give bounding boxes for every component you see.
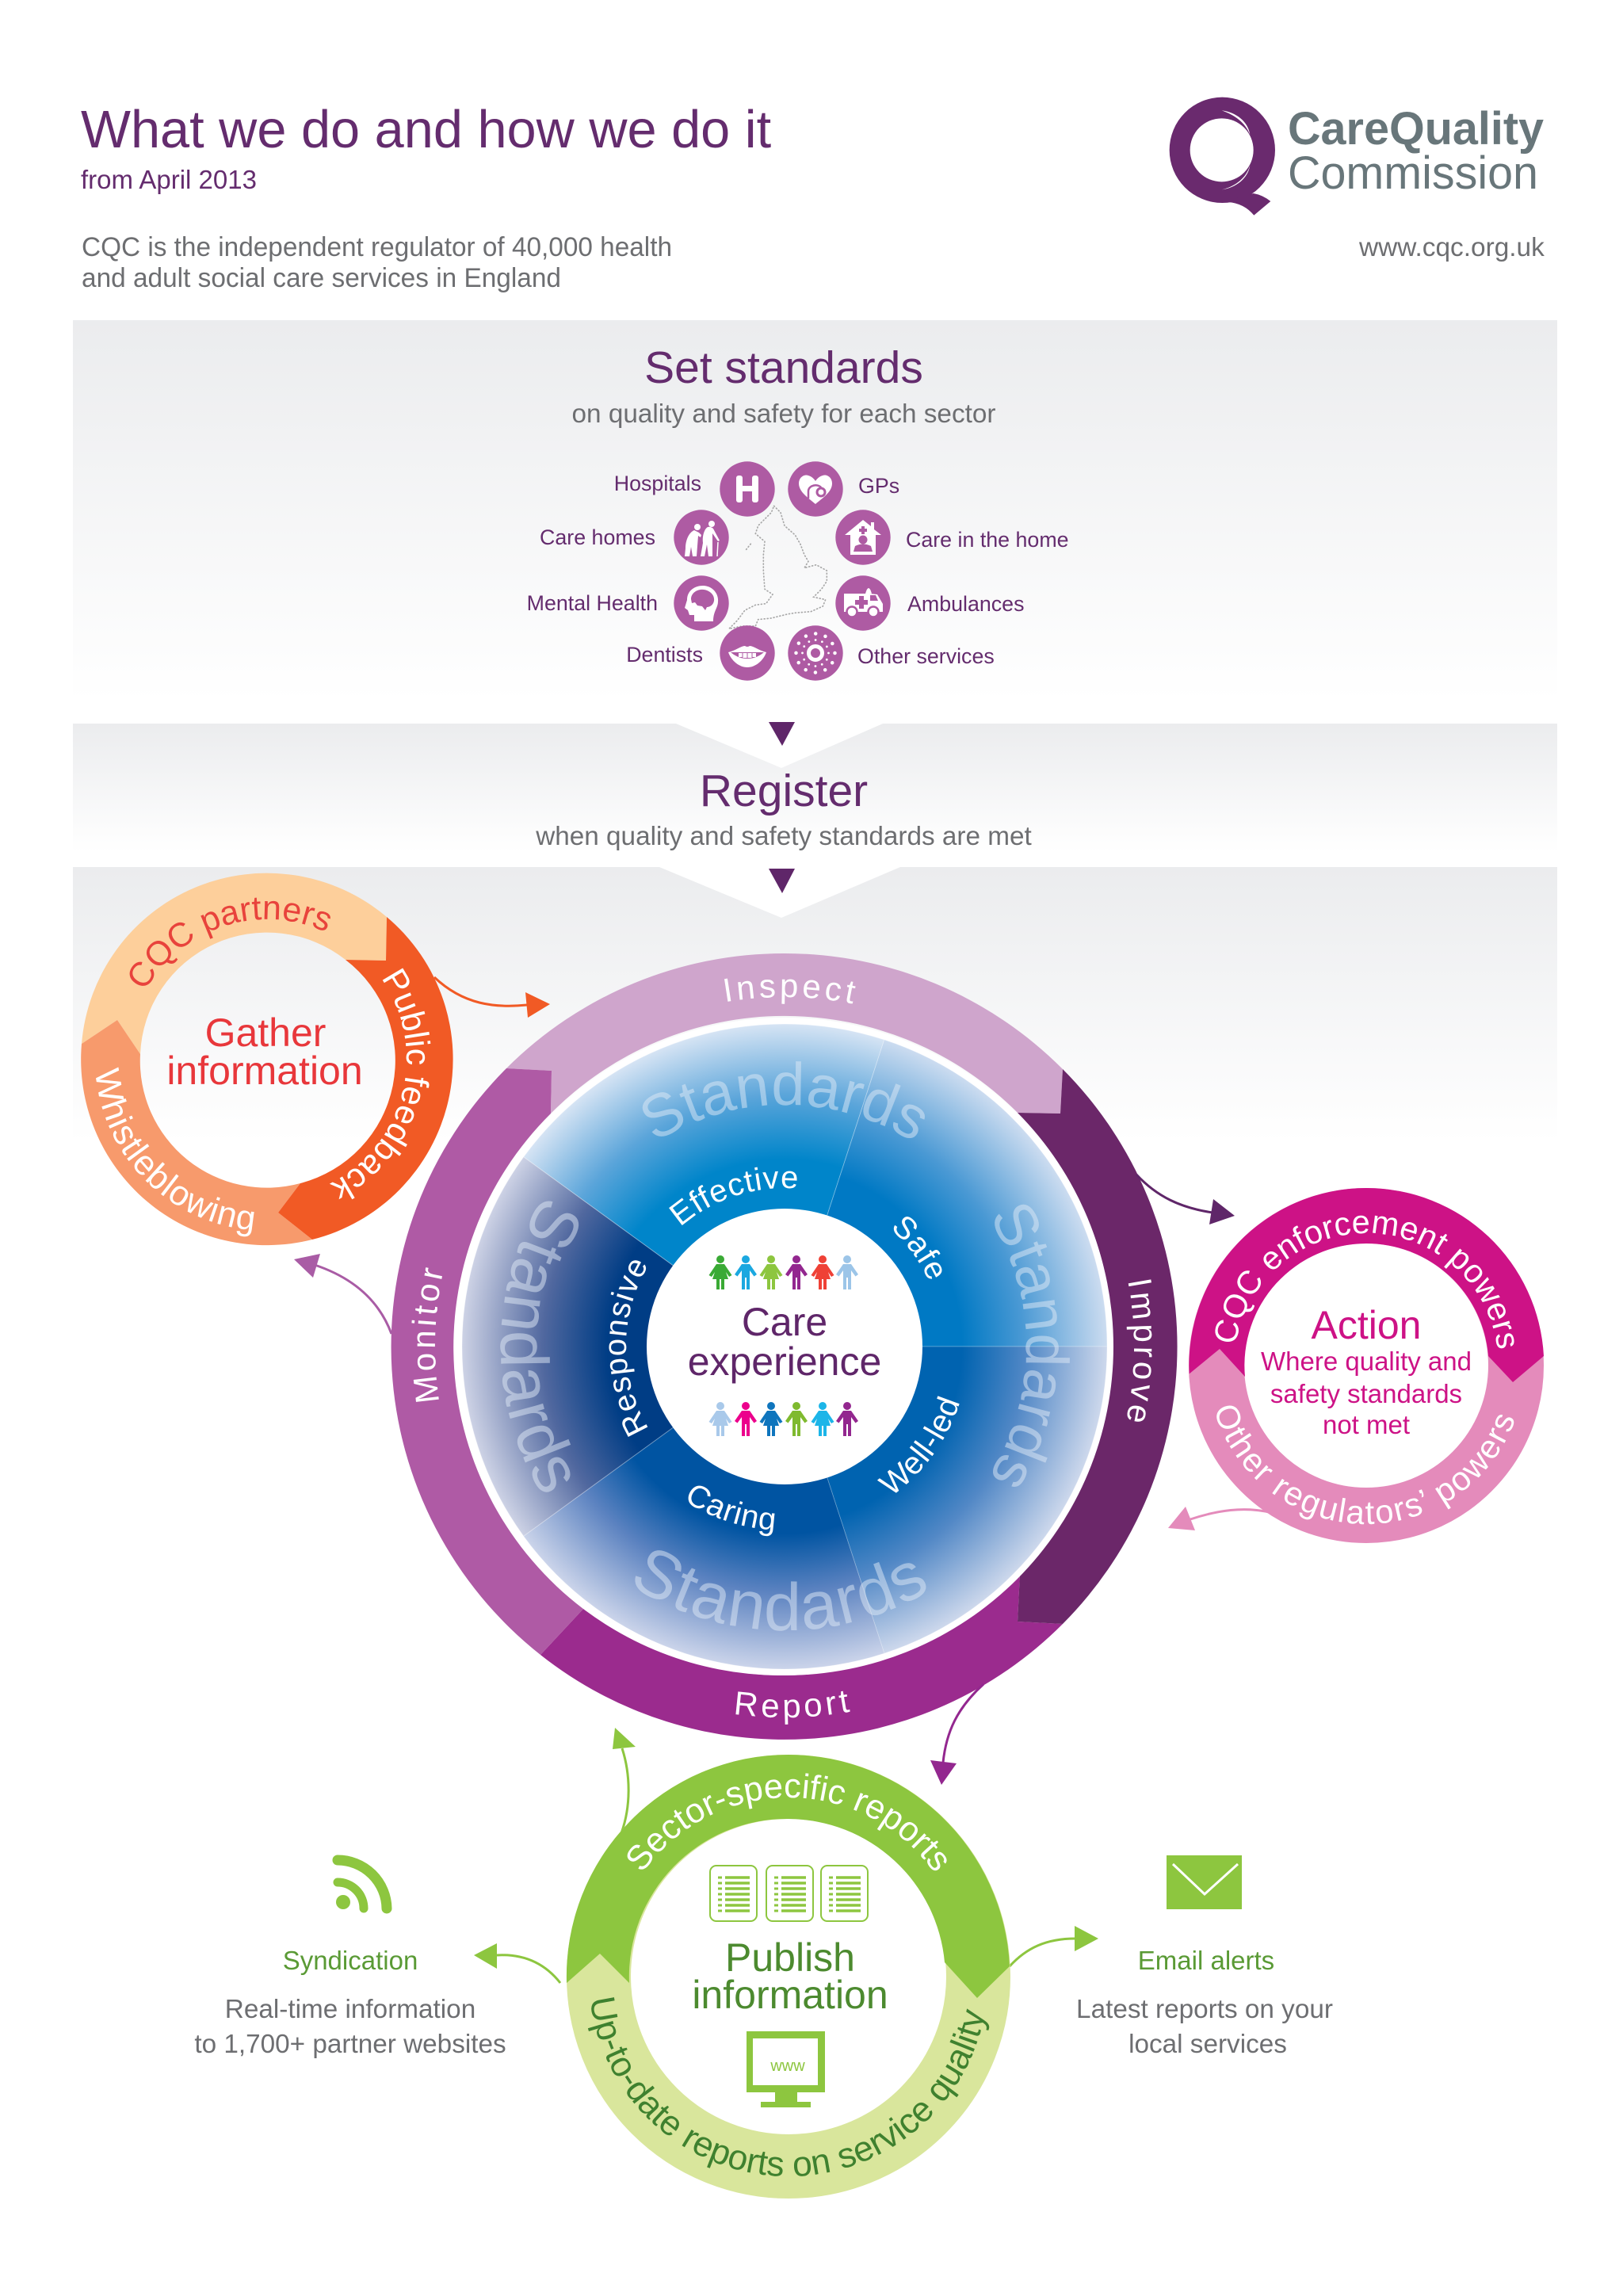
title: What we do and how we do it — [81, 101, 772, 159]
syndication description: to 1,700+ partner websites — [194, 2030, 506, 2059]
icon: envelope — [1167, 1855, 1242, 1909]
sector labels: Ambulances — [907, 592, 1024, 616]
segment: whistleblowing — [81, 1020, 312, 1245]
subtitle: date: from April 2013 — [81, 165, 257, 194]
arrow: improve to action — [1136, 1175, 1235, 1224]
action circle — [1189, 1188, 1544, 1543]
action heading: Action — [1312, 1303, 1421, 1347]
action description — [1261, 1347, 1472, 1439]
ghost standards labels: Standards — [642, 1061, 925, 1138]
heading: register: Register — [700, 766, 868, 816]
logo wordmark: Commission — [1288, 147, 1538, 199]
people row bottom — [708, 1402, 858, 1436]
arrow: register to inspection — [769, 869, 795, 893]
publish information text — [692, 1935, 888, 2017]
icon: hospitals — [720, 461, 775, 517]
ghost standards labels: Standards — [500, 1201, 579, 1492]
arrow: publish to report — [613, 1728, 636, 1833]
map of England — [729, 506, 827, 628]
syndication block — [194, 1860, 506, 2059]
ring: inspect — [506, 953, 1063, 1114]
arrow: monitor to gather — [294, 1254, 391, 1334]
action description: Where quality and — [1261, 1347, 1472, 1376]
subheading: register: when quality and safety standards are met — [535, 822, 1032, 851]
gather information circle — [81, 873, 453, 1246]
sector labels: Care homes — [540, 525, 655, 549]
website: www.cqc.org.uk — [1358, 233, 1545, 262]
ring: monitor — [391, 1068, 583, 1655]
sector labels: Other services — [857, 644, 995, 668]
segment: well-led — [785, 1347, 1107, 1653]
ring: report — [540, 1573, 1063, 1740]
publish information circle — [566, 1755, 1010, 2199]
ring text: Whistleblowing — [96, 1067, 254, 1236]
email description: local services — [1128, 2030, 1287, 2059]
panel: inspection cycle background — [73, 867, 1557, 1141]
ghost standards labels: Standards — [993, 1205, 1070, 1487]
publish information text: information — [692, 1973, 888, 2017]
segment: other regulators powers — [1216, 1216, 1516, 1515]
segment: responsive — [462, 1157, 785, 1536]
action description: safety standards — [1270, 1379, 1462, 1408]
segment labels: Well-led — [877, 1396, 960, 1493]
ring text: Sector-specific reports — [628, 1773, 947, 1870]
sector labels — [527, 472, 1069, 668]
segment: sector-specific reports — [567, 1755, 1010, 1998]
intro text: CQC is the independent regulator of 40,000 health — [82, 232, 672, 262]
white disc edge — [456, 1018, 1113, 1675]
ring text — [588, 1773, 989, 2176]
action description: not met — [1323, 1410, 1410, 1439]
care experience text: Care — [742, 1300, 827, 1344]
segment: up-to-date reports — [599, 1786, 978, 2167]
intro text — [82, 232, 672, 293]
email alerts block — [1076, 1855, 1333, 2059]
ghost standards labels: Standards — [636, 1550, 926, 1631]
logo wordmark — [1288, 103, 1544, 199]
syndication description — [194, 1995, 506, 2059]
segment labels: Effective — [669, 1167, 797, 1225]
arrow: publish to email — [1010, 1926, 1098, 1966]
ghost standards labels — [500, 1061, 1070, 1631]
ring text: Other regulators’ powers — [1216, 1406, 1514, 1525]
centre: care experience — [647, 1209, 922, 1484]
ring text: CQC partners — [130, 897, 330, 986]
arrow: publish to syndication — [474, 1943, 560, 1983]
icon: care homes — [674, 510, 729, 565]
sector labels: Hospitals — [614, 472, 701, 495]
ring labels: Monitor — [412, 1267, 442, 1402]
main cycle wheel — [391, 953, 1178, 1740]
segment: public feedback — [278, 917, 453, 1240]
email description — [1076, 1995, 1333, 2059]
segment labels: Responsive — [609, 1260, 648, 1437]
sector labels: Mental Health — [527, 591, 658, 615]
care experience text — [688, 1300, 881, 1384]
care experience text: experience — [688, 1339, 881, 1384]
icon: monitor — [747, 2031, 825, 2107]
segment labels: Caring — [688, 1485, 775, 1536]
panel: register background — [73, 724, 1557, 852]
segment: CQC partners — [82, 873, 387, 1054]
sector labels: Care in the home — [906, 528, 1069, 552]
icon: Q mark — [1170, 97, 1275, 216]
gather information text — [166, 1010, 363, 1093]
sector labels: Dentists — [626, 643, 703, 667]
ring labels: Report — [735, 1691, 850, 1725]
segment: safe — [785, 1040, 1107, 1347]
email description: Latest reports on your — [1076, 1995, 1333, 2024]
people row top — [708, 1255, 858, 1289]
arrow: report to publish — [930, 1684, 983, 1785]
segment: CQC enforcement powers — [1189, 1188, 1544, 1382]
icon: RSS — [336, 1860, 387, 1909]
ring labels: Improve — [1127, 1279, 1152, 1422]
icon: GPs — [788, 461, 843, 517]
ring text — [96, 897, 495, 1301]
logo: Care Quality Commission — [1170, 97, 1544, 216]
heading: set standards: Set standards — [644, 342, 923, 393]
icon: monitor: www — [769, 2057, 805, 2075]
intro text: and adult social care services in England — [82, 263, 561, 293]
ring: improve — [1018, 1069, 1178, 1624]
arrow: gather to inspect — [434, 977, 550, 1018]
icon: mental health — [674, 575, 729, 631]
sector icons and labels — [527, 461, 1069, 681]
ring labels: Inspect — [724, 978, 856, 1004]
arrow: standards to register — [769, 722, 795, 746]
email heading: Email alerts — [1138, 1946, 1274, 1975]
ring text: Public feedback — [330, 968, 431, 1200]
gather information text: information — [166, 1049, 363, 1093]
icon: other services — [788, 625, 843, 681]
sector labels: GPs — [858, 474, 899, 498]
gather information text: Gather — [205, 1010, 326, 1055]
segment labels — [609, 1167, 960, 1536]
ring text: Up-to-date reports on service quality — [588, 1997, 989, 2176]
segment: caring — [524, 1347, 884, 1669]
panel: set standards background — [73, 320, 1557, 701]
syndication heading: Syndication — [283, 1946, 418, 1975]
segment: effective — [524, 1024, 884, 1347]
subheading: set standards: on quality and safety for each sector — [572, 399, 995, 429]
ring text: CQC enforcement powers — [1215, 1216, 1514, 1349]
logo wordmark: CareQuality — [1288, 103, 1544, 155]
ring text — [1215, 1216, 1514, 1525]
icon: care in the home — [835, 510, 891, 565]
arrow: other regulators to wheel — [1168, 1507, 1273, 1530]
syndication description: Real-time information — [225, 1995, 475, 2024]
segment labels: Safe — [894, 1217, 941, 1279]
icon: report documents — [710, 1866, 868, 1921]
icon: ambulances — [835, 575, 891, 631]
ring labels — [371, 978, 1197, 1758]
icon: dentists — [720, 625, 775, 681]
publish information text: Publish — [725, 1935, 855, 1980]
